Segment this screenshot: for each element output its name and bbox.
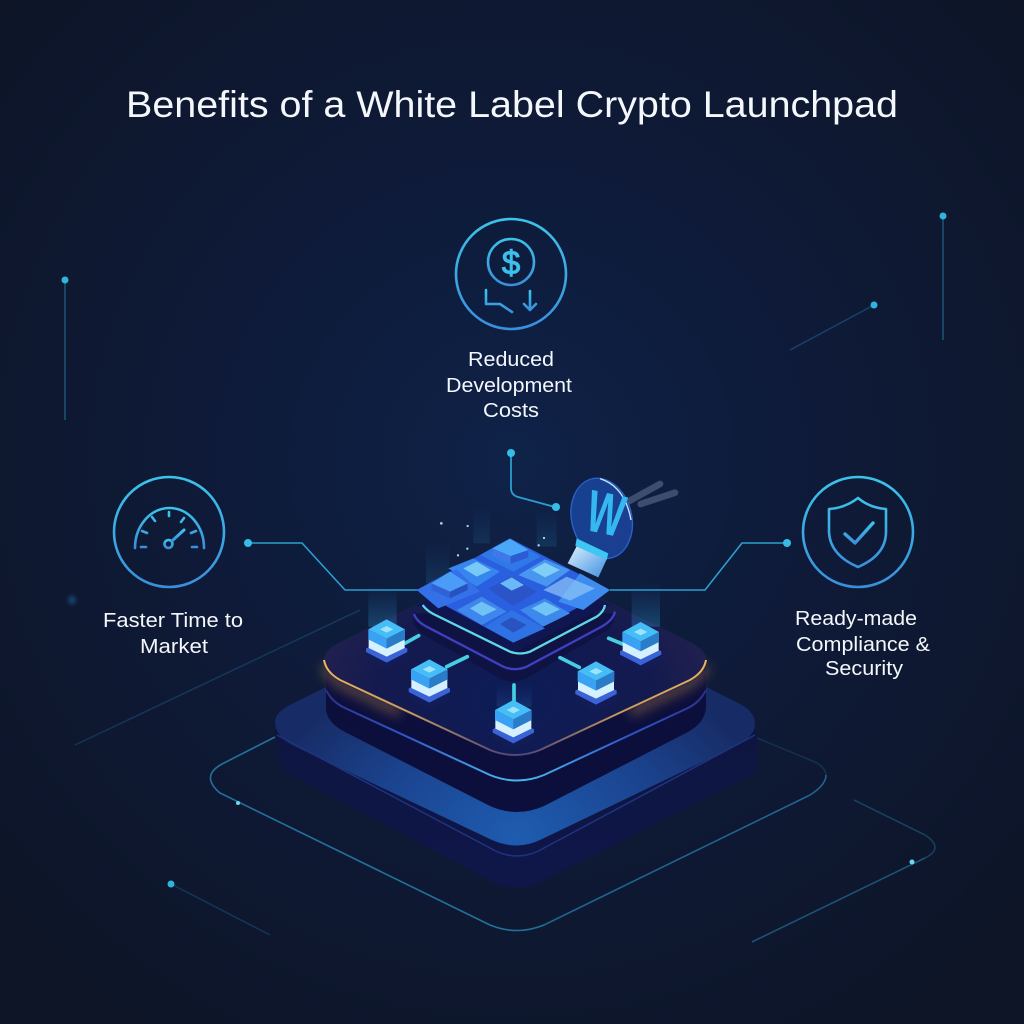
node links xyxy=(405,636,623,701)
white label lens and brush: W xyxy=(581,478,631,550)
label: ready-made compliance and security: Security xyxy=(825,658,903,680)
tile: upper right xyxy=(518,559,570,587)
hub base layers xyxy=(413,560,615,682)
label: reduced development costs: Costs xyxy=(483,400,539,422)
benefit: faster time to market xyxy=(103,477,243,658)
benefit: ready-made compliance and security xyxy=(795,477,931,680)
platform outline rings xyxy=(210,737,935,942)
light beams xyxy=(368,507,660,707)
node cubes xyxy=(366,619,661,750)
benefit: reduced development costs xyxy=(446,219,572,422)
tile: left large xyxy=(417,569,480,608)
tile: upper left xyxy=(448,558,500,587)
icon: dollar with downward arrow xyxy=(456,219,566,329)
central hub and nodes xyxy=(366,472,675,750)
label: ready-made compliance and security: Compliance & xyxy=(796,634,931,656)
label: reduced development costs xyxy=(446,349,572,422)
tile: bottom xyxy=(485,610,545,643)
tile: center xyxy=(488,577,537,606)
icon glyph: dollar sign: $ xyxy=(502,244,520,281)
hub tile plate xyxy=(417,538,610,643)
decorative accent lines and dots xyxy=(62,212,946,935)
label: ready-made compliance and security: Ready-made xyxy=(795,608,917,630)
connector: top benefit to hub xyxy=(507,449,560,511)
label: faster time to market: Market xyxy=(140,636,208,658)
glow: warm edge lights xyxy=(325,665,705,712)
label: faster time to market xyxy=(103,610,243,658)
connector: right benefit to hub xyxy=(610,539,791,590)
sparkle particles xyxy=(440,522,545,556)
tile: lower left xyxy=(457,597,507,625)
title: Benefits of a White Label Crypto Launchpad xyxy=(126,83,898,125)
label: reduced development costs: Reduced xyxy=(468,349,554,371)
icon: speedometer xyxy=(114,477,224,587)
platform: lower tier xyxy=(275,600,757,888)
tile: top xyxy=(480,538,541,572)
icon: shield with check xyxy=(803,477,913,587)
tile: lower right xyxy=(520,598,570,627)
label: ready-made compliance and security xyxy=(795,608,931,680)
label: faster time to market: Faster Time to xyxy=(103,610,243,632)
tile: right glass xyxy=(543,573,610,610)
connector: left benefit to hub xyxy=(244,539,420,590)
label: reduced development costs: Development xyxy=(446,375,572,397)
white label lens and brush xyxy=(563,472,675,577)
platform: middle tier xyxy=(324,563,706,812)
